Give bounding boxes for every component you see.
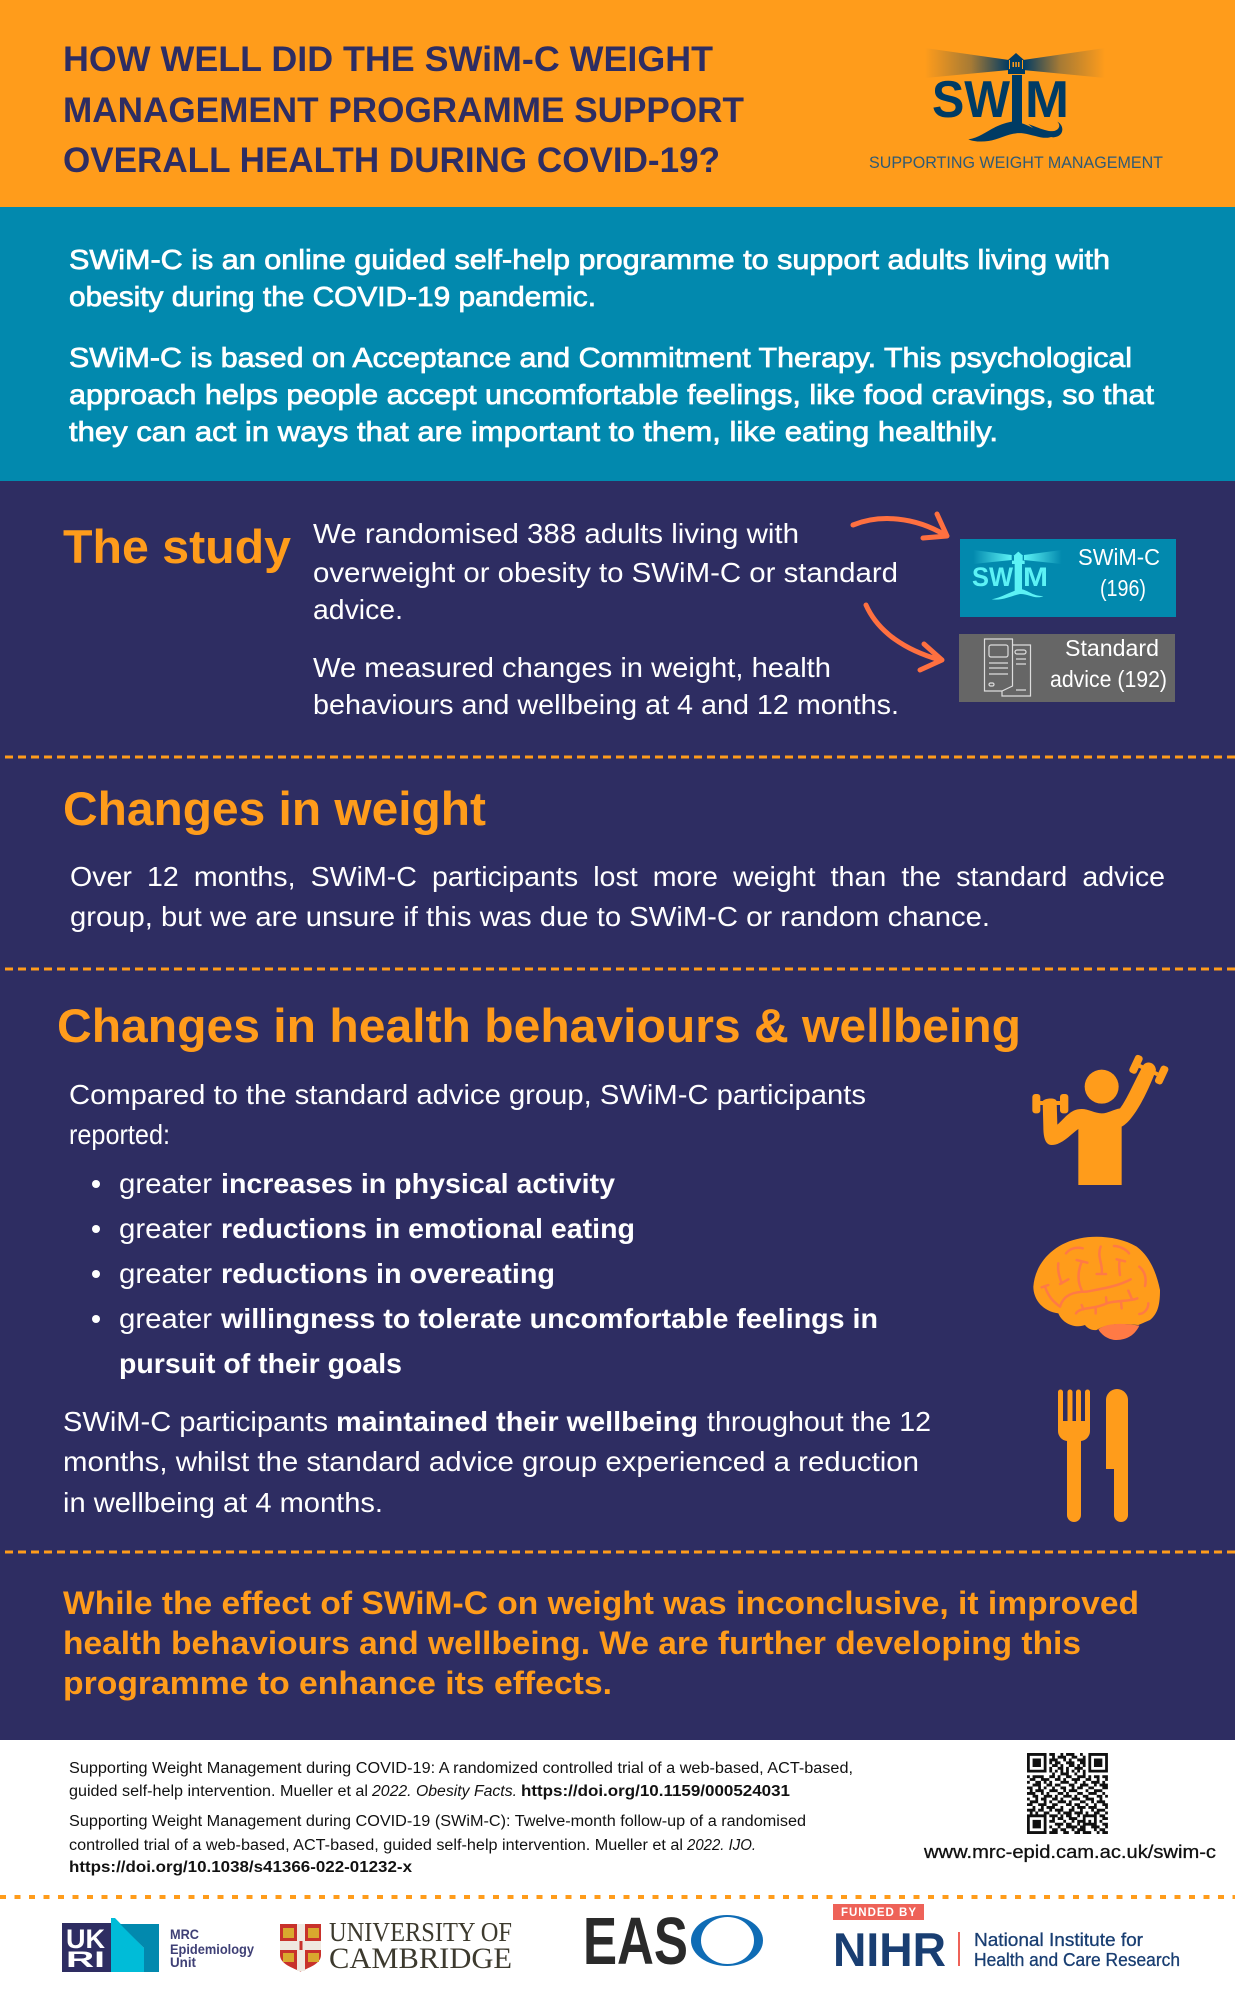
panel: changes in weight <box>63 782 1165 932</box>
panel: conclusion <box>63 1585 1139 1701</box>
box: SWiM-C group: SW <box>972 562 1013 592</box>
heading: health behaviours: Changes in health behaviours & wellbeing <box>57 999 1021 1052</box>
text: weight result: Over 12 months, SWiM-C participants lost more weight than the standard advice <box>70 861 1165 892</box>
box: SWiM-C group: M <box>1023 562 1048 592</box>
text: programme description: obesity during the COVID-19 pandemic. <box>69 281 596 312</box>
box: standard advice group: Standard <box>1065 635 1159 661</box>
text: study description: We randomised 388 adults living with <box>313 518 799 549</box>
text: acceptance and commitment therapy: SWiM-C is based on Acceptance and Commitment Therapy. This psychological <box>69 342 1132 373</box>
list: reported benefits: increases in physical activity <box>221 1168 615 1199</box>
text: programme description: SWiM-C is an online guided self-help programme to support adults living with <box>69 244 1110 275</box>
text: wellbeing result: maintained their wellbeing <box>336 1406 698 1437</box>
panel: introduction <box>0 207 1235 481</box>
text: wellbeing result <box>63 1406 931 1518</box>
text: weight result <box>70 861 1165 932</box>
text: study description: We measured changes in weight, health <box>313 652 831 683</box>
logo: SWiM lighthouse <box>869 48 1163 172</box>
reference: Obesity Facts <box>69 1760 853 1800</box>
text: comparison intro: Compared to the standard advice group, SWiM-C participants <box>69 1079 866 1110</box>
box: SWiM-C group <box>960 539 1176 617</box>
panel: navy background <box>0 481 1235 1740</box>
reference: Obesity Facts: 2022. Obesity Facts. <box>371 1783 517 1800</box>
logo: SWiM lighthouse: M <box>1025 71 1069 129</box>
list: reported benefits: greater <box>119 1303 212 1334</box>
text: study description: advice. <box>313 594 403 625</box>
panel: conclusion: While the effect of SWiM-C on weight was inconclusive, it improved <box>63 1585 1139 1621</box>
title: OVERALL HEALTH DURING COVID-19? <box>63 141 720 180</box>
icon: person lifting weights <box>1032 1054 1169 1185</box>
reference: IJO: Supporting Weight Management during COVID-19 (SWiM-C): Twelve-month follow-up of a randomised <box>69 1813 806 1830</box>
arrow: to standard advice <box>866 605 942 670</box>
heading: changes in weight: Changes in weight <box>63 782 486 835</box>
logo: SWiM lighthouse: SUPPORTING WEIGHT MANAGEMENT <box>869 153 1163 172</box>
reference: IJO: https://doi.org/10.1038/s41366-022-01232-x <box>69 1859 412 1876</box>
logo: UKRI MRC Epidemiology Unit: Unit <box>170 1954 196 1970</box>
reference: IJO: controlled trial of a web-based, ACT-based, guided self-help intervention. Mueller et al <box>69 1837 683 1854</box>
reference: IJO <box>69 1813 806 1876</box>
reference: Obesity Facts: Supporting Weight Management during COVID-19: A randomized controlled trial of a web-based, ACT-based, <box>69 1760 853 1777</box>
logo: funded by NIHR <box>833 1904 1180 1976</box>
text: comparison intro: reported: <box>69 1119 170 1150</box>
panel: changes in health behaviours and wellbeing <box>57 999 1169 1522</box>
logo: UKRI MRC Epidemiology Unit: UK <box>66 1924 105 1954</box>
logo: UKRI MRC Epidemiology Unit: RI <box>66 1947 105 1972</box>
text: acceptance and commitment therapy: approach helps people accept uncomfortable feelings, like food cravings, so that <box>69 379 1154 410</box>
logo: funded by NIHR: NIHR <box>833 1923 946 1976</box>
logo: funded by NIHR: Health and Care Research <box>974 1949 1180 1970</box>
arrow: to SWiM-C <box>853 514 947 538</box>
text: acceptance and commitment therapy <box>69 342 1154 447</box>
text: comparison intro <box>69 1079 866 1150</box>
panel: references <box>69 1754 1216 1876</box>
logo: University of Cambridge: UNIVERSITY OF <box>329 1917 512 1947</box>
list: reported benefits: greater <box>119 1258 212 1289</box>
box: standard advice group: advice (192) <box>1050 666 1167 692</box>
logo: funded by NIHR: National Institute for <box>974 1929 1143 1950</box>
reference: Obesity Facts: https://doi.org/10.1159/000524031 <box>521 1783 790 1800</box>
text: wellbeing result: throughout the 12 <box>707 1406 931 1437</box>
panel: conclusion: health behaviours and wellbeing. We are further developing this <box>63 1625 1081 1661</box>
icon: brain <box>1033 1237 1160 1340</box>
text: study description <box>313 518 899 720</box>
panel: conclusion: programme to enhance its effects. <box>63 1665 612 1701</box>
box: standard advice group <box>959 634 1175 702</box>
logo: UKRI MRC Epidemiology Unit: Epidemiology <box>170 1941 254 1957</box>
text: programme description <box>69 244 1110 312</box>
text: wellbeing result: in wellbeing at 4 months. <box>63 1487 383 1518</box>
list: reported benefits: pursuit of their goals <box>119 1348 402 1379</box>
list: reported benefits: greater <box>119 1168 212 1199</box>
logo: EASO: EAS <box>583 1904 688 1979</box>
logo: funded by NIHR: FUNDED BY <box>841 1907 916 1919</box>
title <box>63 40 744 180</box>
panel: the study <box>63 514 1176 720</box>
text: study description: behaviours and wellbeing at 4 and 12 months. <box>313 689 899 720</box>
text: wellbeing result: months, whilst the standard advice group experienced a reduction <box>63 1446 919 1477</box>
list: reported benefits: reductions in overeating <box>221 1258 555 1289</box>
QR code <box>1027 1754 1108 1833</box>
logo: UKRI MRC Epidemiology Unit <box>62 1918 254 1972</box>
icon: fork and knife <box>1058 1389 1128 1522</box>
text: website address: www.mrc-epid.cam.ac.uk/swim-c <box>923 1842 1216 1862</box>
logo: SWiM lighthouse: SW <box>932 71 1011 129</box>
heading: the study: The study <box>63 520 291 573</box>
title: MANAGEMENT PROGRAMME SUPPORT <box>63 91 744 130</box>
list: reported benefits: willingness to tolerate uncomfortable feelings in <box>220 1303 878 1334</box>
box: SWiM-C group: SWiM-C <box>1078 544 1160 570</box>
reference: Obesity Facts: guided self-help intervention. Mueller et al <box>69 1783 368 1800</box>
text: wellbeing result: SWiM-C participants <box>63 1406 328 1437</box>
logo: University of Cambridge <box>280 1917 512 1975</box>
list: reported benefits <box>92 1168 878 1379</box>
text: weight result: group, but we are unsure if this was due to SWiM-C or random chance. <box>70 901 990 932</box>
text: acceptance and commitment therapy: they can act in ways that are important to them, like eating healthily. <box>69 416 998 447</box>
list: reported benefits: greater <box>119 1213 212 1244</box>
reference: IJO: 2022. IJO. <box>686 1837 756 1854</box>
box: SWiM-C group: (196) <box>1100 575 1146 601</box>
list: reported benefits: reductions in emotional eating <box>221 1213 635 1244</box>
title: HOW WELL DID THE SWiM-C WEIGHT <box>63 40 713 79</box>
panel: header <box>0 0 1235 207</box>
logo: University of Cambridge: CAMBRIDGE <box>329 1942 512 1975</box>
panel: partner logos <box>62 1904 1180 1979</box>
logo: UKRI MRC Epidemiology Unit: MRC <box>170 1926 199 1942</box>
text: study description: overweight or obesity to SWiM-C or standard <box>313 557 898 588</box>
